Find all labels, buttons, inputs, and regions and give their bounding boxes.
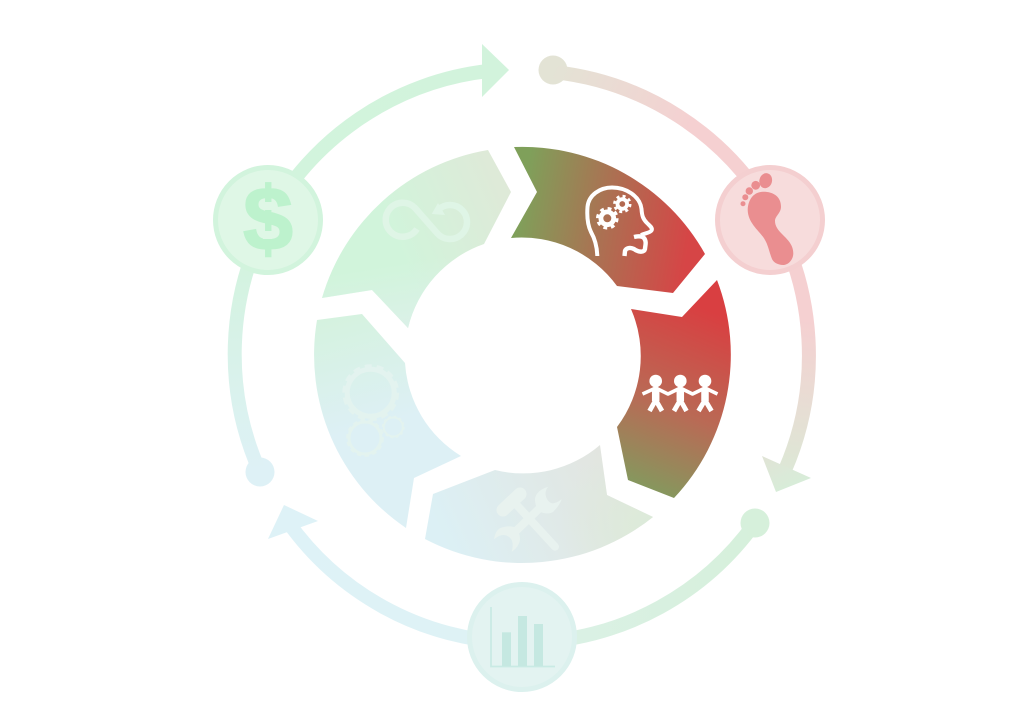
icon: three gears [344,366,404,456]
panel: head segment [511,147,705,293]
panel: infinity segment [322,150,511,328]
icon: dollar badge [216,168,320,272]
icon: hammer and wrench [494,487,562,552]
icon: infinity loop arrow [386,203,467,239]
panel: tools segment [425,445,653,563]
arc: right dot to chart and left arrow [268,505,770,643]
outer ring [235,44,811,643]
arc: finance to top arrow [268,44,509,220]
panel: people segment [617,280,731,498]
arc: top dot to footprint and right arrow [538,56,811,492]
icon: paper chain people [642,375,718,411]
arc: left dot to finance [235,220,274,486]
panel: gears segment [314,314,461,528]
icon: dollar badge: $ [243,170,293,270]
icon: bar chart badge [470,584,574,690]
icon: footprint badge [718,168,822,272]
icon: head with gears [587,188,652,256]
